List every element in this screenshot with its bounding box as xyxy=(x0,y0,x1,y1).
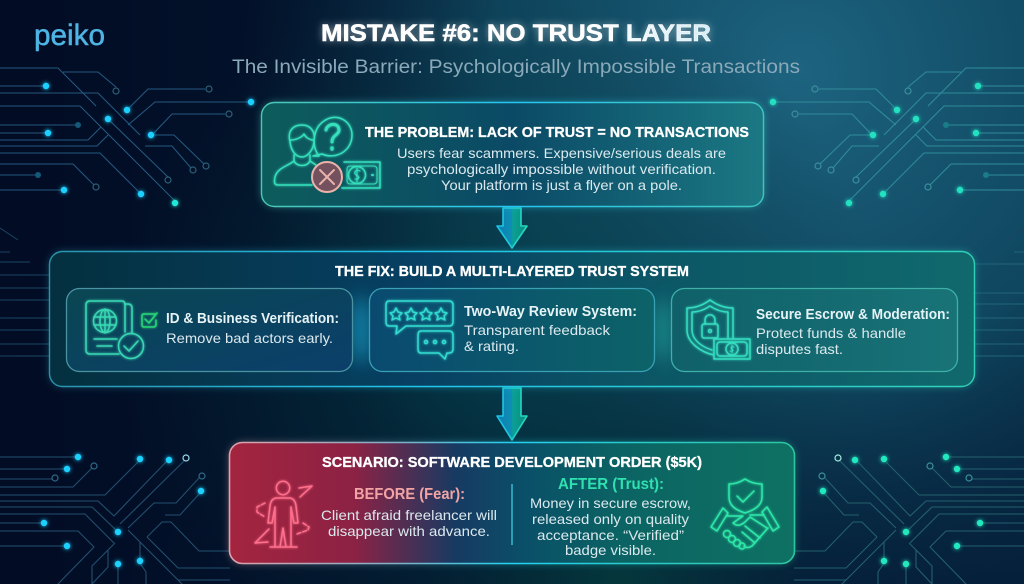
heading: the problem: THE PROBLEM: LACK OF TRUST = NO TRANSACTIONS xyxy=(365,125,749,141)
text: after: badge visible. xyxy=(565,542,656,558)
text: escrow: Protect funds & handle xyxy=(756,325,906,341)
circuit: bottom left xyxy=(0,454,230,584)
icon: shield with lock and cash xyxy=(687,300,750,359)
text: after: Money in secure escrow, xyxy=(530,495,691,511)
panel: the fix xyxy=(49,251,975,387)
subtitle: The Invisible Barrier: Psychologically Impossible Transactions xyxy=(232,57,800,78)
text: review system xyxy=(464,304,637,354)
panel: the problem xyxy=(261,102,764,207)
text: escrow xyxy=(756,307,950,357)
icon: shield and handshake xyxy=(711,479,779,549)
divider xyxy=(511,484,513,545)
title: MISTAKE #6: NO TRUST LAYER xyxy=(321,20,711,47)
circuit: top left xyxy=(0,68,254,206)
card: two-way review system xyxy=(370,288,654,372)
text: after: released only on quality xyxy=(532,511,689,527)
icon: fearful person xyxy=(255,481,312,547)
icon: x badge xyxy=(312,162,342,192)
circuit: bottom right xyxy=(794,454,1024,584)
arrow: problem to fix xyxy=(497,208,527,248)
text: before xyxy=(321,486,497,539)
text: id verification xyxy=(166,311,339,346)
logo: peiko xyxy=(34,19,105,52)
text: review system: Transparent feedback xyxy=(464,322,611,338)
circuit: top right xyxy=(770,68,1024,206)
card: secure escrow and moderation xyxy=(672,288,958,372)
text: id verification: ID & Business Verification: xyxy=(166,311,339,327)
text: problem description: psychologically impossible without verification. xyxy=(407,161,716,177)
text: problem description: Your platform is just a flyer on a pole. xyxy=(441,177,682,193)
text: review system: & rating. xyxy=(464,338,519,354)
icon: check box xyxy=(142,313,157,327)
text: escrow: Secure Escrow & Moderation: xyxy=(756,307,950,323)
heading: scenario: SCENARIO: SOFTWARE DEVELOPMENT ORDER ($5K) xyxy=(322,454,702,471)
text: after: acceptance. “Verified” xyxy=(537,527,684,543)
icon: worried user with question and cash xyxy=(274,117,380,188)
text: id verification: Remove bad actors early. xyxy=(166,330,333,346)
text: problem description xyxy=(397,145,726,193)
text: escrow: disputes fast. xyxy=(756,341,843,357)
arrow: fix to scenario xyxy=(497,388,527,440)
title: MISTAKE #6: NO TRUST LAYER xyxy=(321,20,711,47)
text: before: Client afraid freelancer will xyxy=(321,507,497,523)
heading: the fix: THE FIX: BUILD A MULTI-LAYERED TRUST SYSTEM xyxy=(335,264,689,280)
icon: review bubbles with stars xyxy=(386,301,453,359)
text: after: AFTER (Trust): xyxy=(558,476,664,493)
text: before: disappear with advance. xyxy=(328,523,490,539)
text: problem description: Users fear scammers. Expensive/serious deals are xyxy=(397,145,726,161)
text: review system: Two-Way Review System: xyxy=(464,304,637,320)
icon: passport with check xyxy=(86,301,144,358)
text: before: BEFORE (Fear): xyxy=(354,486,465,503)
circuit: mid-edge stubs xyxy=(0,228,1024,356)
card: id and business verification xyxy=(66,288,352,372)
panel: scenario xyxy=(229,442,795,564)
text: after xyxy=(530,476,691,558)
